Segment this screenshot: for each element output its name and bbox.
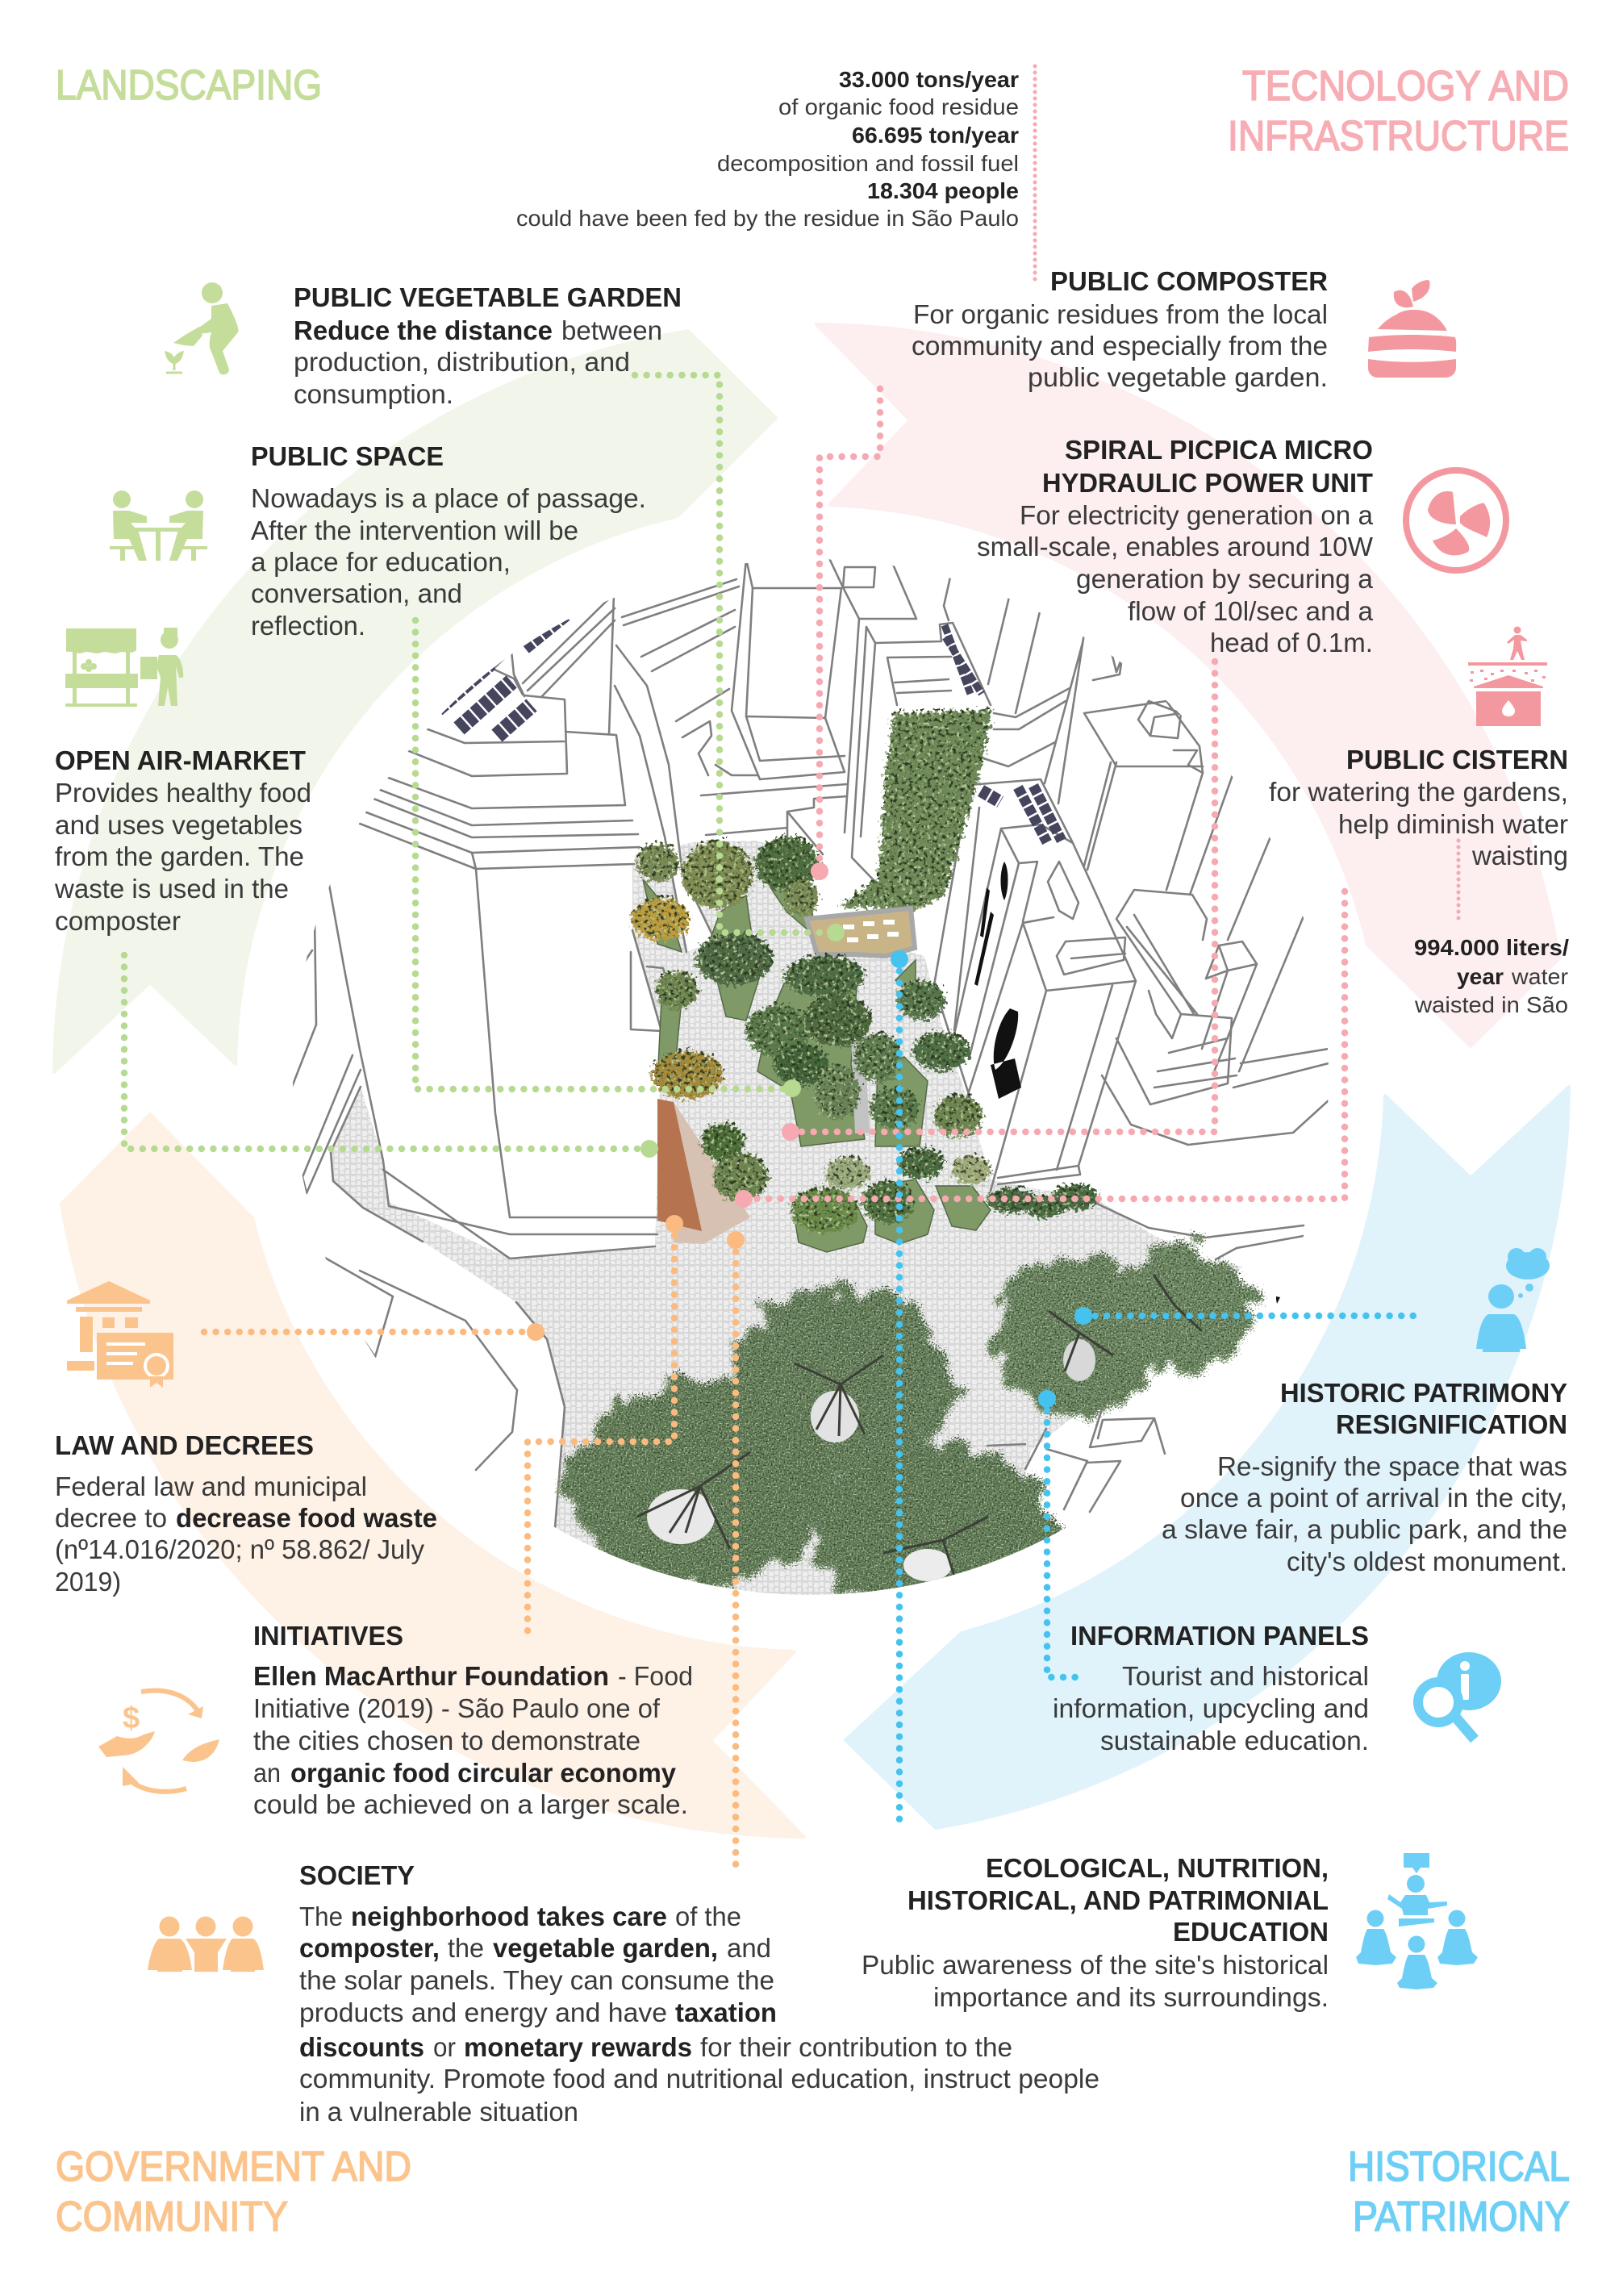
text block: public cistern: for watering the gardens, <box>1269 778 1568 808</box>
text block: food residue statistics <box>516 67 1019 231</box>
icon: circular economy <box>98 1691 219 1792</box>
text block: law and decrees: Federal law and municipal <box>55 1472 367 1502</box>
text block: public space: conversation, and <box>251 579 462 609</box>
text block: public vegetable garden: consumption. <box>294 380 453 410</box>
text block: public cistern: help diminish water <box>1338 810 1568 840</box>
text block: public cistern: PUBLIC CISTERN <box>1346 745 1568 774</box>
text block: spiral picpica micro hydraulic unit: For electricity generation on a <box>1020 501 1373 531</box>
icon: circular economy: $ <box>123 1701 140 1735</box>
title: historical patrimony: PATRIMONY <box>1353 2194 1570 2240</box>
text block: public space: PUBLIC SPACE <box>251 441 444 471</box>
text block: education: HISTORICAL, AND PATRIMONIAL <box>907 1885 1329 1915</box>
text block: food residue statistics: 33.000 tons/year <box>839 67 1019 92</box>
leader dots: blue <box>891 950 1416 1823</box>
text block: historic patrimony resignification: Re-signify the space that was <box>1217 1452 1567 1482</box>
text block: law and decrees: (nº14.016/2020; nº 58.862/ July <box>55 1535 424 1565</box>
text block: education: importance and its surroundings. <box>933 1983 1329 2013</box>
text block: society: or <box>433 2033 456 2063</box>
text block: public space: After the intervention will be <box>251 516 578 546</box>
text block: public vegetable garden: PUBLIC VEGETABLE GARDEN <box>294 282 682 312</box>
text block: historic patrimony resignification: HISTORIC PATRIMONY <box>1280 1378 1567 1408</box>
tree crown gaps and branches <box>637 1275 1202 1581</box>
text block: initiatives: organic food circular economy <box>290 1758 677 1788</box>
title: government and community: COMMUNITY <box>56 2194 288 2240</box>
text block: public composter: community and especially from the <box>912 332 1328 361</box>
text block: society: products and energy and have <box>299 1998 667 2028</box>
icon: information magnifier <box>1418 1652 1501 1739</box>
text block: society: the <box>448 1934 484 1964</box>
text block: society: neighborhood takes care <box>351 1902 667 1931</box>
text block: public vegetable garden: Reduce the distance <box>294 315 553 345</box>
text block: society: community. Promote food and nutritional education, instruct people <box>299 2064 1099 2094</box>
text block: historic patrimony resignification <box>1162 1378 1567 1577</box>
text block: public space: reflection. <box>251 612 365 641</box>
text block: information panels: INFORMATION PANELS <box>1070 1621 1369 1651</box>
text block: food residue statistics: decomposition and fossil fuel <box>717 151 1019 176</box>
text block: society: composter, <box>299 1933 440 1963</box>
text block: initiatives: Ellen MacArthur Foundation <box>253 1661 609 1691</box>
text block: education: ECOLOGICAL, NUTRITION, <box>986 1853 1329 1883</box>
text block: initiatives: could be achieved on a larger scale. <box>253 1790 688 1820</box>
title: technology and infrastructure: TECNOLOGY AND <box>1242 63 1569 110</box>
solar panels <box>439 616 1062 842</box>
text block: public composter <box>912 266 1328 393</box>
text block: society: for their contribution to the <box>700 2033 1012 2063</box>
panel: historical patrimony arrow band <box>845 1087 1569 1828</box>
text block: initiatives <box>253 1621 693 1820</box>
text block: information panels: sustainable education. <box>1100 1726 1369 1756</box>
text block: public vegetable garden: between <box>561 316 662 346</box>
text block: public space: Nowadays is a place of passage. <box>251 484 646 514</box>
text block: water waste statistic: 994.000 liters/ <box>1414 935 1569 960</box>
large tree canopies <box>570 1242 1253 1620</box>
text block: water waste statistic: year <box>1457 964 1504 989</box>
paved plaza <box>331 841 1242 1597</box>
text block: society: in a vulnerable situation <box>299 2098 578 2127</box>
text block: public composter: public vegetable garden. <box>1028 363 1328 393</box>
text block: society: vegetable garden, <box>493 1933 718 1963</box>
roof garden <box>807 908 915 956</box>
text block: initiatives: - Food <box>618 1662 693 1692</box>
text block: water waste statistic: water <box>1511 964 1568 989</box>
tiny mark <box>1276 1296 1280 1304</box>
title: landscaping: LANDSCAPING <box>56 62 322 109</box>
leader dots: green <box>124 375 845 1158</box>
text block: water waste statistic: waisted in São <box>1414 992 1568 1017</box>
text block: food residue statistics: could have been fed by the residue in São Paulo <box>516 206 1019 231</box>
text block: spiral picpica micro hydraulic unit: flow of 10l/sec and a <box>1128 597 1373 627</box>
text block: law and decrees: LAW AND DECREES <box>55 1430 314 1460</box>
text block: public cistern <box>1269 745 1568 871</box>
text block: information panels: Tourist and historical <box>1122 1662 1369 1692</box>
text block: society: discounts <box>299 2032 424 2062</box>
text block: society: The <box>299 1902 343 1932</box>
text block: law and decrees: 2019) <box>55 1568 121 1597</box>
text block: historic patrimony resignification: city's oldest monument. <box>1287 1547 1567 1577</box>
text block: open air-market: Provides healthy food <box>55 779 311 808</box>
icon: gardener <box>166 282 238 374</box>
text block: open air-market: OPEN AIR-MARKET <box>55 745 306 775</box>
text block: society: of the <box>675 1902 741 1932</box>
icon: market stall and vendor <box>65 628 183 707</box>
text block: law and decrees: decrease food waste <box>176 1503 437 1533</box>
text block: spiral picpica micro hydraulic unit: generation by securing a <box>1076 565 1373 595</box>
text block: public vegetable garden: production, distribution, and <box>294 348 630 378</box>
text block: historic patrimony resignification: RESIGNIFICATION <box>1336 1409 1567 1439</box>
text block: initiatives: INITIATIVES <box>253 1621 403 1651</box>
text block: public cistern: waisting <box>1471 841 1568 871</box>
rear tower linework <box>701 557 1070 882</box>
text block: historic patrimony resignification: once a point of arrival in the city, <box>1180 1484 1567 1513</box>
leader dots: pink <box>735 66 1458 1208</box>
text block: society: SOCIETY <box>299 1860 415 1890</box>
graffiti on building <box>974 862 1021 1099</box>
text block: education <box>862 1853 1329 2013</box>
text block: law and decrees: decree to <box>55 1504 167 1534</box>
text block: public space: a place for education, <box>251 548 511 578</box>
text block: spiral picpica micro hydraulic unit: SPIRAL PICPICA MICRO <box>1065 435 1373 465</box>
text block: initiatives: an <box>253 1759 281 1789</box>
icon: law building and certificate <box>67 1281 173 1388</box>
text block: open air-market: waste is used in the <box>54 875 289 904</box>
text block: historic patrimony resignification: a slave fair, a public park, and the <box>1162 1515 1567 1545</box>
panel: landscaping arrow band <box>54 331 776 1072</box>
text block: society: monetary rewards <box>464 2032 692 2062</box>
text block: education: EDUCATION <box>1173 1917 1329 1947</box>
text block: spiral picpica micro hydraulic unit: small-scale, enables around 10W <box>977 532 1373 562</box>
text block: water waste statistic <box>1414 935 1569 1017</box>
text block: law and decrees <box>55 1430 437 1597</box>
text block: information panels: information, upcycling and <box>1053 1694 1369 1724</box>
text block: public composter: For organic residues from the local <box>913 300 1328 330</box>
text block: information panels <box>1053 1621 1369 1756</box>
text block: spiral picpica micro hydraulic unit: head of 0.1m. <box>1210 628 1373 658</box>
icon: public cistern <box>1468 626 1547 726</box>
road linework <box>323 1087 1165 1528</box>
text block: society <box>299 1860 1099 2127</box>
right buildings linework <box>934 633 1329 1259</box>
text block: public space <box>251 441 646 641</box>
text block: spiral picpica micro hydraulic unit <box>977 435 1373 658</box>
text block: food residue statistics: 18.304 people <box>867 178 1019 203</box>
text block: open air-market <box>54 745 311 937</box>
panel: government arrow band <box>61 1114 804 1837</box>
text block: society: and <box>727 1934 771 1964</box>
curved white building over plaza <box>668 845 711 952</box>
title: historical patrimony: HISTORICAL <box>1348 2144 1570 2190</box>
text block: open air-market: and uses vegetables <box>55 811 302 841</box>
icon: compost pile <box>1368 280 1456 378</box>
left building linework <box>292 579 739 1259</box>
icon: meditation group <box>1356 1853 1478 1989</box>
text block: initiatives: Initiative (2019) - São Paulo one of <box>253 1694 661 1724</box>
title: government and community: GOVERNMENT AND <box>56 2144 411 2190</box>
text block: initiatives: the cities chosen to demonstrate <box>253 1726 640 1756</box>
text block: food residue statistics: of organic food residue <box>778 94 1019 119</box>
panel: technology arrow band <box>816 324 1559 1046</box>
leader dots: orange <box>204 1215 745 1868</box>
text block: society: the solar panels. They can consume the <box>299 1966 774 1996</box>
text block: food residue statistics: 66.695 ton/year <box>852 123 1019 148</box>
icon: three people <box>148 1917 264 1972</box>
text block: spiral picpica micro hydraulic unit: HYDRAULIC POWER UNIT <box>1042 468 1373 498</box>
icon: people at table <box>110 491 207 561</box>
text block: open air-market: composter <box>55 907 181 937</box>
title: technology and infrastructure <box>1228 63 1569 160</box>
text block: society: taxation <box>675 1998 777 2027</box>
timber deck and paving <box>674 1102 750 1244</box>
small trees <box>632 837 1099 1233</box>
text block: public vegetable garden <box>294 282 682 410</box>
text block: public composter: PUBLIC COMPOSTER <box>1050 266 1328 296</box>
icon: fan turbine <box>1406 470 1506 570</box>
title: historical patrimony <box>1348 2144 1570 2240</box>
green wall <box>839 709 992 911</box>
text block: open air-market: from the garden. The <box>55 842 304 872</box>
text block: education: Public awareness of the site's historical <box>862 1951 1329 1981</box>
central axonometric scene <box>292 557 1329 1620</box>
title: technology and infrastructure: INFRASTRUCTURE <box>1228 113 1569 160</box>
title: government and community <box>56 2144 411 2240</box>
ground garden patches <box>643 855 991 1252</box>
icon: person thinking <box>1476 1248 1550 1352</box>
